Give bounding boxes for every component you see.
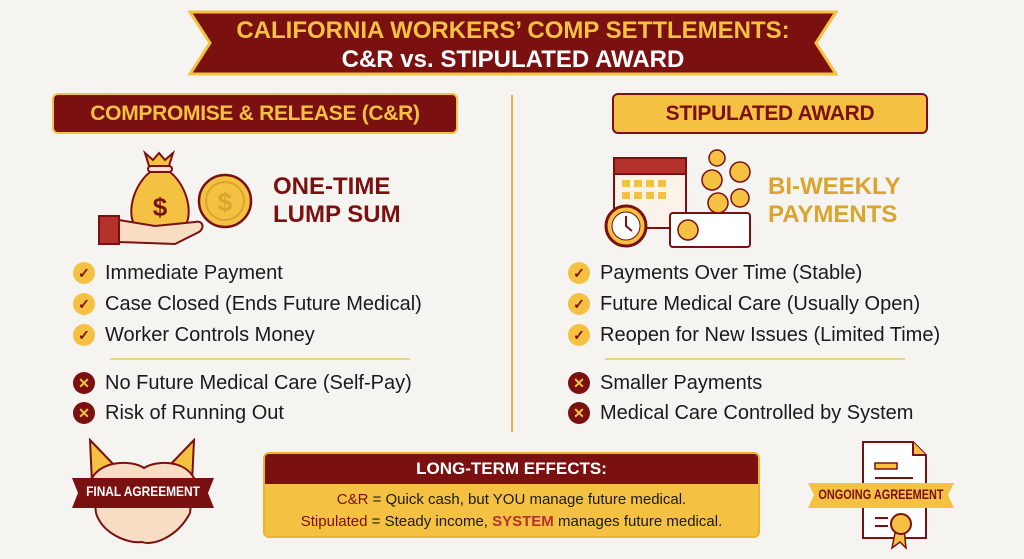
right list: ✓: [573, 296, 585, 312]
right list: ✓: [573, 264, 585, 280]
title banner: [188, 10, 838, 76]
panel: long-term effects: [263, 452, 760, 538]
icon: certificate ongoing agreement: [808, 441, 954, 550]
left list: No Future Medical Care (Self-Pay): [105, 372, 412, 394]
left list: Case Closed (Ends Future Medical): [105, 292, 422, 314]
left list: ✓: [78, 326, 90, 342]
left list: ✕: [78, 374, 90, 390]
panel: long-term effects: Stipulated = Steady income, SYSTEM manages future medical.: [301, 513, 722, 530]
panel: long-term effects: LONG-TERM EFFECTS:: [416, 459, 607, 478]
left list: [73, 262, 422, 424]
left list: Worker Controls Money: [105, 324, 315, 346]
left list: ✓: [78, 296, 90, 312]
right list: Future Medical Care (Usually Open): [600, 292, 920, 314]
title banner: C&R vs. STIPULATED AWARD: [342, 46, 684, 73]
left header: [52, 93, 458, 134]
left list: ✓: [78, 264, 90, 280]
divider: [511, 95, 513, 432]
label: bi-weekly payments: BI-WEEKLY: [768, 173, 900, 200]
right list: Medical Care Controlled by System: [600, 402, 913, 424]
left list: Risk of Running Out: [105, 402, 284, 424]
icon: money bag in hand and coin: $: [218, 187, 233, 217]
label: one-time lump sum: [273, 173, 401, 228]
right list: Smaller Payments: [600, 372, 762, 394]
right list: Payments Over Time (Stable): [600, 262, 862, 284]
title banner: CALIFORNIA WORKERS’ COMP SETTLEMENTS:: [236, 17, 790, 44]
left list: Immediate Payment: [105, 262, 283, 284]
right list: Reopen for New Issues (Limited Time): [600, 324, 940, 346]
right list: [568, 262, 940, 424]
left list: ✕: [78, 404, 90, 420]
right list: ✕: [573, 374, 585, 390]
right header: [612, 93, 928, 134]
icon: handshake final agreement: [72, 438, 214, 544]
label: bi-weekly payments: [768, 173, 900, 228]
icon: calendar, clock, coins, check: [604, 149, 751, 248]
icon: money bag in hand and coin: [98, 150, 252, 245]
right list: ✕: [573, 404, 585, 420]
icon: money bag in hand and coin: $: [153, 192, 168, 222]
left header: COMPROMISE & RELEASE (C&R): [90, 102, 420, 124]
icon: certificate ongoing agreement: ONGOING AGREEMENT: [818, 486, 944, 502]
right header: STIPULATED AWARD: [666, 102, 874, 124]
label: one-time lump sum: LUMP SUM: [273, 201, 401, 228]
label: one-time lump sum: ONE-TIME: [273, 173, 390, 200]
right list: ✓: [573, 326, 585, 342]
label: bi-weekly payments: PAYMENTS: [768, 201, 897, 228]
panel: long-term effects: C&R = Quick cash, but YOU manage future medical.: [337, 491, 686, 508]
icon: handshake final agreement: FINAL AGREEMENT: [86, 483, 200, 499]
